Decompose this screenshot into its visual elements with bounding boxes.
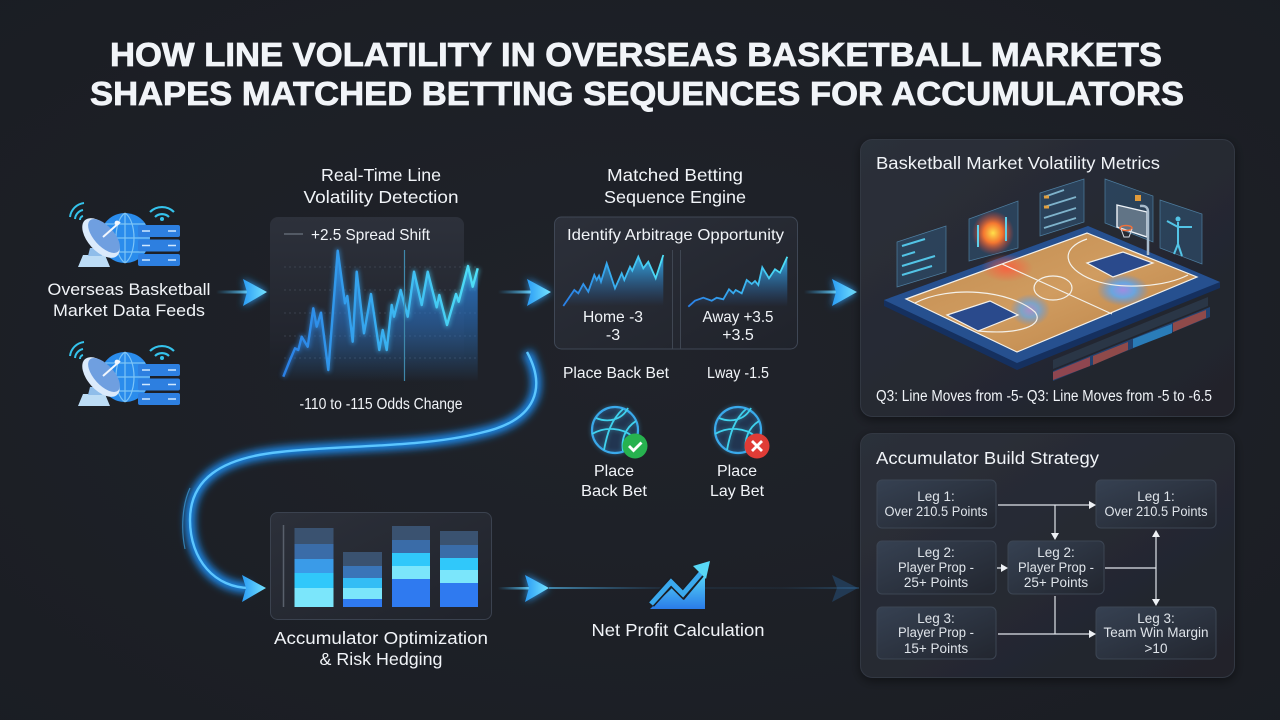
label: accumulator optimization: Accumulator Optimization: [274, 628, 488, 648]
icon: basketball with check: [592, 407, 648, 458]
chart label: spread shift: +2.5 Spread Shift: [311, 227, 431, 244]
panel: accumulator build strategy: [860, 434, 1234, 678]
chart area: [283, 251, 478, 382]
label: home line: -3: [606, 327, 620, 344]
odds tiles: [1053, 297, 1210, 381]
arrow: engine to metrics: [804, 279, 857, 306]
title: SHAPES MATCHED BETTING SEQUENCES FOR ACCUMULATORS: [90, 75, 1184, 112]
arrow: accumulator to net profit and strategy: [498, 575, 859, 602]
box: leg 1 right: Over 210.5 Points: [1104, 504, 1208, 519]
title: [90, 36, 1184, 112]
bar 1: [294, 528, 334, 607]
label: place back bet below icon: [581, 463, 648, 500]
box: leg 1 right: Leg 1:: [1137, 489, 1175, 504]
label: net profit calculation: Net Profit Calculation: [592, 620, 764, 640]
panel title: Identify Arbitrage Opportunity: [567, 227, 784, 244]
chart line: [283, 251, 478, 377]
label: overseas data feeds: [48, 280, 211, 320]
icon: net profit trend: [650, 561, 710, 609]
arrow: engine feedback curve to accumulator: [183, 352, 536, 602]
box: leg 3 left: 15+ Points: [904, 641, 968, 656]
label: overseas data feeds: Overseas Basketball: [48, 280, 211, 299]
box: leg 3 right: [1096, 607, 1216, 659]
arrow: feeds to detection: [216, 279, 267, 306]
label: place back bet: Place Back Bet: [563, 365, 670, 382]
label: home line: Home -3: [583, 309, 643, 326]
heading: matched betting sequence engine: Matched Betting: [607, 165, 743, 185]
box: leg 2 left: Player Prop -: [898, 560, 974, 575]
bar 4: [440, 531, 478, 607]
label: odds change: -110 to -115 Odds Change: [300, 396, 462, 413]
box: leg 1 left: Over 210.5 Points: [884, 504, 988, 519]
label: home line: [583, 309, 643, 344]
title: HOW LINE VOLATILITY IN OVERSEAS BASKETBALL MARKETS: [110, 36, 1162, 73]
floating hoop card: [1105, 179, 1153, 255]
floating stat card: [897, 226, 946, 287]
floating table card: [1040, 179, 1084, 236]
box: leg 2 middle: 25+ Points: [1024, 575, 1088, 590]
floating player card: [1160, 200, 1202, 264]
icon: data feed top: [70, 203, 180, 267]
panel: basketball market volatility metrics: [860, 140, 1234, 416]
bar 2: [343, 552, 382, 607]
panel: arbitrage opportunity: [554, 217, 798, 349]
label: overseas data feeds: Market Data Feeds: [53, 301, 205, 320]
box: leg 3 left: Player Prop -: [898, 625, 974, 640]
label: place back bet below icon: Back Bet: [581, 483, 648, 500]
label: place lay bet below icon: Place: [717, 463, 757, 480]
panel: volatility line chart: [270, 217, 478, 392]
box: leg 2 left: [877, 541, 996, 594]
label: place lay bet below icon: Lay Bet: [710, 483, 765, 500]
box: leg 2 left: Leg 2:: [917, 545, 955, 560]
label: away line: [702, 309, 774, 344]
chart: away: [688, 257, 787, 307]
flow arrows: [997, 501, 1160, 638]
heading: real-time line volatility detection: Real-Time Line: [321, 165, 441, 185]
box: leg 2 middle: [1008, 541, 1104, 594]
heading: real-time line volatility detection: Volatility Detection: [304, 187, 458, 207]
label: place lay bet below icon: [710, 463, 765, 500]
box: leg 3 left: Leg 3:: [917, 611, 955, 626]
label: away line: +3.5: [722, 327, 754, 344]
label: accumulator optimization: [274, 628, 488, 669]
bar 3: [392, 526, 430, 607]
icon: data feed bottom: [70, 342, 180, 406]
box: leg 1 right: [1096, 480, 1216, 528]
panel: accumulator bar chart: [270, 512, 492, 620]
icon: basketball with cross: [715, 407, 770, 458]
heading: matched betting sequence engine: Sequence Engine: [604, 187, 746, 207]
box: leg 2 left: 25+ Points: [904, 575, 968, 590]
box: leg 1 left: [877, 480, 996, 528]
heading: matched betting sequence engine: [604, 165, 746, 207]
panel heading: Basketball Market Volatility Metrics: [876, 153, 1160, 173]
box: leg 3 right: Leg 3:: [1137, 611, 1175, 626]
box: leg 2 middle: Player Prop -: [1018, 560, 1094, 575]
label: lway: Lway -1.5: [707, 365, 769, 382]
chart: home: [563, 255, 663, 306]
box: leg 1 left: Leg 1:: [917, 489, 955, 504]
heading: real-time line volatility detection: [304, 165, 458, 207]
label: accumulator optimization: & Risk Hedging: [320, 649, 442, 669]
panel heading: Accumulator Build Strategy: [876, 448, 1099, 468]
box: leg 3 right: Team Win Margin: [1104, 625, 1208, 640]
box: leg 3 left: [877, 607, 996, 659]
box: leg 3 right: >10: [1145, 641, 1167, 656]
label: place back bet below icon: Place: [594, 463, 634, 480]
court platform: [884, 226, 1220, 370]
panel caption: Q3: Line Moves from -5- Q3: Line Moves from -5 to -6.5: [876, 388, 1212, 405]
arrow: detection to engine: [498, 279, 551, 306]
box: leg 2 middle: Leg 2:: [1037, 545, 1075, 560]
label: away line: Away +3.5: [702, 309, 774, 326]
floating heat map card: [969, 201, 1018, 261]
